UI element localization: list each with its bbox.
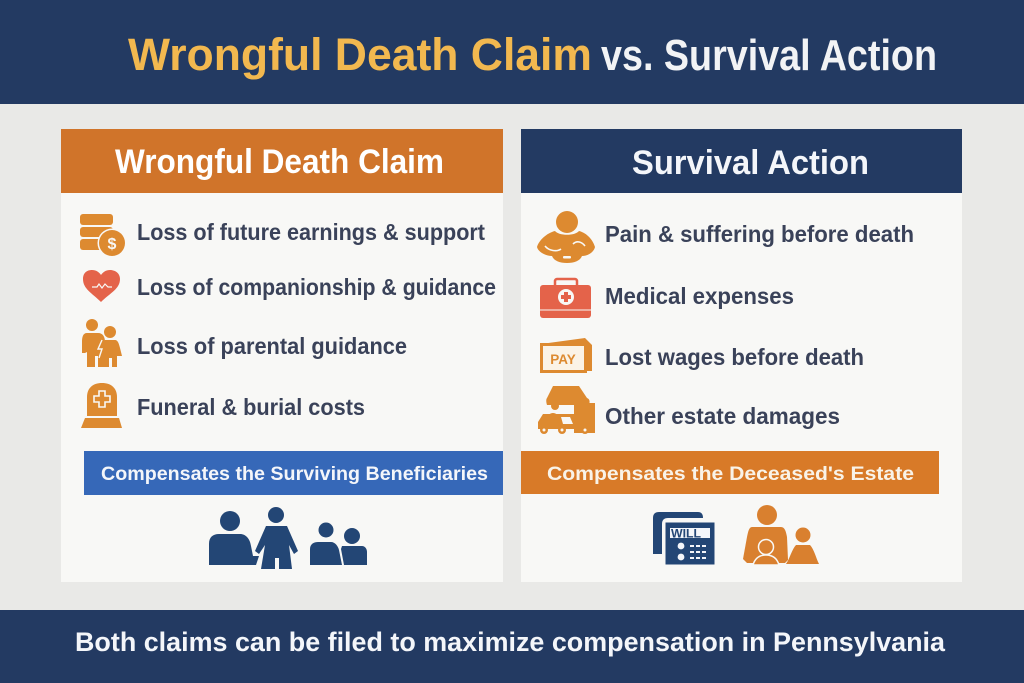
- banner: compensates the surviving beneficiaries: Compensates the Surviving Beneficiaries: [101, 463, 488, 485]
- icon: will document: [653, 512, 715, 565]
- icon: pay stub: [541, 338, 592, 372]
- icon: person in pain: [537, 211, 595, 263]
- panel: survival action: [521, 129, 962, 582]
- panel heading: survival action: [521, 129, 962, 193]
- title: [128, 29, 937, 80]
- text: loss of parental guidance: Loss of parental guidance: [137, 333, 407, 359]
- icon: family: [743, 505, 819, 565]
- icon: coins: [80, 214, 126, 258]
- banner: compensates the deceased's estate: Compensates the Deceased's Estate: [547, 463, 914, 485]
- icon: medical kit: [540, 279, 591, 318]
- title: vs. Survival Action: [601, 31, 937, 80]
- text: loss of future earnings: Loss of future earnings & support: [137, 219, 485, 245]
- icon: surviving family: [209, 507, 367, 569]
- text: other estate damages: Other estate damages: [605, 403, 840, 429]
- text: loss of companionship: Loss of companionship & guidance: [137, 274, 496, 300]
- panel heading: wrongful death claim: Wrongful Death Claim: [115, 143, 444, 181]
- icon: parent and child: [82, 319, 122, 367]
- panel heading: wrongful death claim: [61, 129, 503, 193]
- icon: pay stub: PAY: [550, 352, 576, 367]
- icon: coins: $: [108, 236, 117, 253]
- banner: compensates the surviving beneficiaries: [84, 451, 503, 495]
- banner: compensates the deceased's estate: [521, 451, 939, 494]
- footer band: [0, 610, 1024, 683]
- icon: gravestone: [81, 383, 122, 428]
- text: funeral and burial costs: Funeral & burial costs: [137, 394, 365, 420]
- title: Wrongful Death Claim: [128, 29, 592, 80]
- header band: [0, 0, 1024, 104]
- footer text: Both claims can be filed to maximize compensation in Pennsylvania: [75, 627, 946, 657]
- text: pain and suffering: Pain & suffering before death: [605, 221, 914, 247]
- icon: heart: [83, 270, 120, 302]
- icon: vehicles and property: [538, 386, 595, 434]
- panel: wrongful death claim: [61, 129, 503, 582]
- icon: will document: WILL: [671, 528, 701, 540]
- text: lost wages: Lost wages before death: [605, 344, 864, 370]
- text: medical expenses: Medical expenses: [605, 283, 794, 309]
- panel heading: survival action: Survival Action: [632, 144, 869, 182]
